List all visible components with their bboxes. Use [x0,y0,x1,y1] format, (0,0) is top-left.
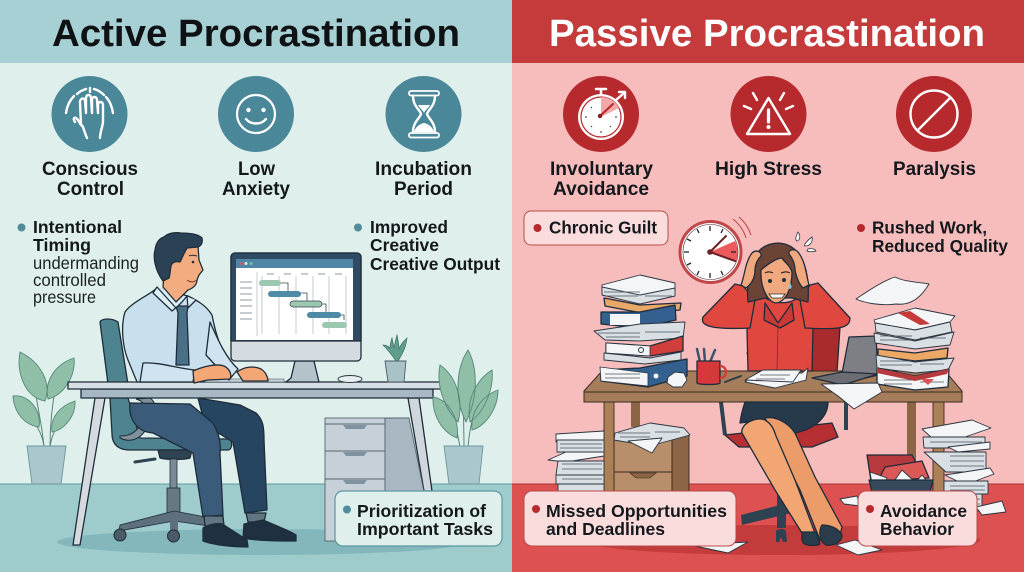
bullet: intentional timing: Intentional [33,217,122,237]
callout: chronic guilt: Chronic Guilt [549,218,657,238]
label: paralysis: Paralysis [893,158,976,180]
label: conscious control: Conscious [42,158,138,180]
chair base [721,402,846,542]
icon: hourglass [386,76,462,152]
label: involuntary avoidance: Involuntary [550,158,653,180]
floor papers [690,496,1006,555]
papers falling off desk [821,383,882,409]
bullet: improved creative output: Creative [370,235,439,255]
callout: avoidance behavior: Avoidance [880,501,967,521]
filing cabinet [325,418,424,541]
callout: avoidance behavior [858,491,977,546]
callout: prioritization of important tasks: Prioritization of [357,501,486,521]
woman's head and hair [741,243,809,303]
callout: avoidance behavior: Behavior [880,519,954,539]
label: incubation period [375,158,472,200]
callout: prioritization of important tasks [335,491,502,546]
plant: left [13,352,75,484]
label: low anxiety: Anxiety [222,178,290,200]
laptop [812,336,878,385]
plant: right [433,350,498,484]
callout: chronic guilt [524,211,668,245]
bullet: rushed work: Reduced Quality [872,236,1008,256]
bullet: improved creative output: Creative Output [370,254,500,274]
label: low anxiety [222,158,290,200]
panel: passive procrastination [512,0,1024,572]
woman's shoes [802,525,842,545]
callout: missed opportunities and deadlines: Missed Opportunities [546,501,727,521]
paper pile floor left [548,431,604,491]
paper pile floor right [922,420,994,511]
heading: passive procrastination: Passive Procrastination [549,13,985,55]
hands [741,250,809,288]
illustration: man working at desk [13,233,498,555]
chair [100,319,232,542]
desk plant [383,335,407,382]
icon: prohibition sign [896,76,972,152]
callout: missed opportunities and deadlines: and Deadlines [546,519,665,539]
flying paper [856,277,929,305]
waste basket [867,455,933,492]
label: involuntary avoidance [550,158,653,200]
callout: prioritization of important tasks: Important Tasks [357,519,493,539]
sweat drops [796,232,816,252]
bullet: improved creative output [354,217,500,274]
paper pile on drawers [614,423,690,453]
stack of binders and papers on desk [594,275,687,387]
bullet: intentional timing: pressure [33,287,96,307]
bullet: rushed work [857,218,1008,256]
bullet: rushed work: Rushed Work, [872,218,987,238]
hands [193,365,268,383]
icon: hand [52,76,128,152]
bullet: intentional timing [18,217,139,307]
icon: stopwatch [563,76,639,152]
bullet: intentional timing: undermanding [33,253,139,273]
desk [68,382,445,545]
heading: active procrastination: Active Procrastination [52,13,460,55]
label: involuntary avoidance: Avoidance [553,178,649,200]
shoes [203,513,296,547]
torso and arms [123,287,268,383]
label: incubation period: Period [394,178,453,200]
crumpled paper [667,372,687,387]
desk [584,371,962,491]
mug with pens [697,349,726,384]
skirt and legs [740,402,842,543]
head [154,233,203,302]
callout: missed opportunities and deadlines [524,491,736,546]
woman's torso and arms [702,283,850,371]
floor shadow [580,525,980,555]
label: incubation period: Incubation [375,158,472,180]
bullet: intentional timing: controlled [33,270,106,290]
icon: warning triangle [730,76,806,152]
floor shadow [57,529,467,555]
mouse and keyboard [205,376,362,382]
far filing drawers [614,434,689,491]
trousers [130,398,267,517]
documents on desk [745,368,808,388]
illustration: stressed woman at messy desk [548,217,1006,555]
stack of papers right [874,308,955,390]
bullet: intentional timing: Timing [33,235,91,255]
wall clock [680,217,751,282]
label: conscious control: Control [57,178,124,200]
label: high stress: High Stress [715,158,822,180]
icon: smiley face [218,76,294,152]
monitor with gantt chart [231,253,361,382]
label: low anxiety: Low [238,158,276,180]
pen on desk [725,376,741,382]
chair back [747,327,840,372]
bullet: improved creative output: Improved [370,217,448,237]
label: conscious control [42,158,138,200]
panel: active procrastination [0,0,512,572]
